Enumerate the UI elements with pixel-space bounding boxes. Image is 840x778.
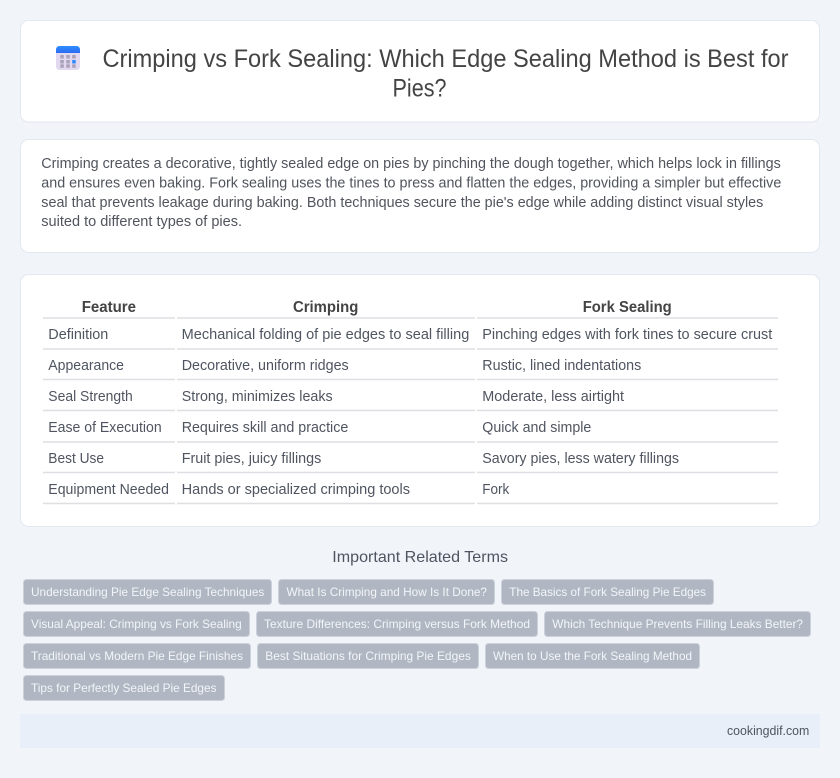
tag [258, 644, 478, 668]
table row: appearance: Appearance [48, 358, 124, 374]
tag [278, 580, 494, 604]
panel: comparison table [20, 274, 820, 526]
table row: definition [43, 327, 778, 350]
text block: introduction: seal that prevents leakage during baking. Both techniques secure the pie's edge while adding distinct visual styles [41, 195, 763, 211]
tag [24, 612, 250, 636]
text block: introduction: Crimping creates a decorative, tightly sealed edge on pies by pinching the dough together, which helps lock in fillings [41, 156, 781, 172]
text block: introduction [41, 156, 781, 230]
table row: appearance: Rustic, lined indentations [482, 358, 641, 374]
tag: Texture Differences: Crimping versus Fork Method [264, 617, 530, 631]
table row: ease of execution: Ease of Execution [48, 420, 162, 436]
tag [502, 580, 714, 604]
table header row: Feature [82, 299, 136, 316]
tag [544, 612, 810, 636]
footer: cookingdif.com [727, 724, 809, 738]
tag: What Is Crimping and How Is It Done? [286, 585, 487, 599]
tag [24, 676, 224, 700]
table row: ease of execution: Requires skill and practice [182, 420, 348, 436]
table row: ease of execution: Quick and simple [482, 420, 591, 436]
heading: important related terms: Important Related Terms [332, 549, 508, 566]
footer [20, 714, 820, 748]
table row: equipment needed [43, 482, 778, 504]
table row: equipment needed: Hands or specialized crimping tools [182, 482, 410, 498]
tag [24, 580, 272, 604]
table row: definition: Pinching edges with fork tines to secure crust [482, 327, 772, 343]
tag: Understanding Pie Edge Sealing Techniques [31, 585, 264, 599]
related terms tags [24, 580, 810, 700]
tag [256, 612, 538, 636]
text block: introduction: suited to different types of pies. [41, 214, 242, 230]
table row: ease of execution [43, 420, 778, 443]
title [102, 45, 788, 102]
tag: Traditional vs Modern Pie Edge Finishes [31, 649, 243, 663]
tag: Best Situations for Crimping Pie Edges [265, 649, 471, 663]
icon: calendar [56, 46, 80, 70]
table row: definition: Definition [48, 327, 108, 343]
tag: When to Use the Fork Sealing Method [493, 649, 692, 663]
table row: seal strength [43, 389, 778, 411]
table row: best use [43, 451, 778, 473]
tag: The Basics of Fork Sealing Pie Edges [509, 585, 706, 599]
table row: best use: Fruit pies, juicy fillings [182, 451, 321, 467]
tag [486, 644, 700, 668]
table header row: Crimping [293, 299, 358, 316]
table row: seal strength: Moderate, less airtight [482, 389, 624, 405]
tag: Which Technique Prevents Filling Leaks Better? [552, 617, 803, 631]
tag [24, 644, 250, 668]
panel: header [20, 20, 820, 122]
table row: best use: Best Use [48, 451, 104, 467]
table row: equipment needed: Equipment Needed [48, 482, 169, 498]
table header row [43, 299, 778, 319]
table row: appearance [43, 358, 778, 380]
tag: Tips for Perfectly Sealed Pie Edges [31, 681, 216, 695]
panel: introduction [20, 140, 820, 252]
table header row: Fork Sealing [583, 299, 672, 316]
text block: introduction: and ensures even baking. Fork sealing uses the tines to press and flatten the edges, providing a simpler but effective [41, 175, 781, 191]
table row: appearance: Decorative, uniform ridges [182, 358, 349, 374]
title: Crimping vs Fork Sealing: Which Edge Sealing Method is Best for [102, 45, 788, 73]
title: Pies? [392, 74, 446, 102]
table row: seal strength: Seal Strength [48, 389, 133, 405]
table row: equipment needed: Fork [482, 482, 510, 498]
table row: definition: Mechanical folding of pie edges to seal filling [182, 327, 469, 343]
table row: seal strength: Strong, minimizes leaks [182, 389, 333, 405]
table row: best use: Savory pies, less watery fillings [482, 451, 679, 467]
tag: Visual Appeal: Crimping vs Fork Sealing [31, 617, 242, 631]
